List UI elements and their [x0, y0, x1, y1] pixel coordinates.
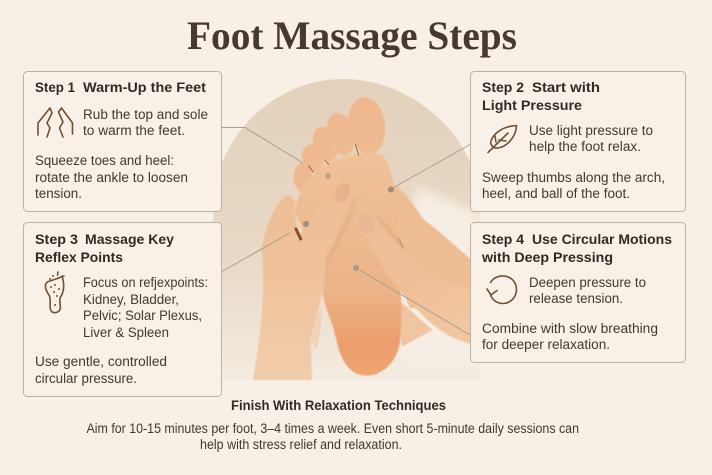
- heading: step 4: Step 4: [482, 231, 524, 247]
- text: step 1 detail: rotate the ankle to loosen: [35, 170, 188, 185]
- right thumb nail: [354, 210, 378, 237]
- text: step 4 intro: Deepen pressure to: [529, 275, 646, 290]
- text: step 2 intro: help the foot relax.: [529, 139, 641, 154]
- text: step 1 intro: to warm the feet.: [83, 123, 185, 138]
- panel: step 1: [24, 72, 222, 212]
- heading: step 1: Step 1: [35, 79, 75, 95]
- leader line: step 3: [222, 221, 309, 272]
- icon: warming hands: [38, 108, 72, 137]
- heading: step 3: [35, 231, 174, 265]
- left thumb nail: [333, 181, 353, 204]
- text: step 1 intro: Rub the top and sole: [83, 107, 208, 122]
- sole of foot: [295, 152, 401, 376]
- arch backdrop: [213, 79, 480, 380]
- finger piece behind heel: [311, 310, 322, 350]
- text: step 4 detail: [482, 321, 658, 352]
- heading: step 2: Step 2: [482, 79, 524, 95]
- footer text: Aim for 10-15 minutes per foot, 3–4 times a week. Even short 5-minute daily sessions can: [86, 421, 579, 436]
- heading: step 4: Use Circular Motions: [532, 231, 672, 247]
- text: step 4 intro: [529, 275, 646, 306]
- panel: step 3: [24, 222, 222, 396]
- text: step 4 detail: Combine with slow breathing: [482, 321, 658, 336]
- text: step 2 intro: Use light pressure to: [529, 123, 653, 138]
- panel: step 2: [470, 72, 686, 212]
- footer text: help with stress relief and relaxation.: [200, 437, 402, 452]
- right thumb and hand: [357, 212, 473, 344]
- text: step 3 detail: circular pressure.: [35, 371, 137, 386]
- shadow beside right thumb: [377, 217, 403, 248]
- toe creases: [309, 144, 359, 172]
- title: Foot Massage Steps: [187, 13, 517, 58]
- forearm piece behind heel: [397, 298, 433, 347]
- text: step 3 detail: Use gentle, controlled: [35, 354, 167, 369]
- heading: step 2: Light Pressure: [482, 97, 582, 113]
- heading: step 3: Reflex Points: [35, 249, 123, 265]
- leader line: step 1: [221, 128, 331, 179]
- text: step 3 intro: [83, 275, 208, 340]
- leader line: step 2: [388, 144, 470, 192]
- heading: step 3: Massage Key: [85, 231, 174, 247]
- footer text: [86, 421, 579, 452]
- heading: step 4: with Deep Pressing: [481, 249, 613, 265]
- icon: feather: [488, 126, 516, 152]
- heading: step 3: Step 3: [35, 231, 78, 247]
- text: step 1 detail: Squeeze toes and heel:: [35, 153, 174, 168]
- text: step 2 detail: Sweep thumbs along the arch,: [482, 170, 665, 185]
- shadow between thumb and palm: [296, 229, 301, 239]
- text: step 1 detail: tension.: [35, 186, 82, 201]
- toes: [293, 95, 389, 193]
- text: step 4 detail: for deeper relaxation.: [482, 337, 610, 352]
- text: step 3 intro: Focus on refjexpoints:: [83, 275, 208, 290]
- text: step 2 detail: heel, and ball of the foot.: [482, 186, 630, 201]
- text: step 3 intro: Kidney, Bladder,: [83, 292, 179, 307]
- hand crease: [399, 238, 403, 248]
- panel: step 4: [470, 222, 686, 362]
- central photo: hands massaging a foot: [210, 79, 487, 385]
- text: step 3 intro: Pelvic; Solar Plexus,: [83, 308, 202, 323]
- text: step 1 detail: [35, 153, 188, 201]
- leader line: step 4: [353, 265, 470, 335]
- heading: step 1: [35, 79, 206, 95]
- heading: step 1: Warm-Up the Feet: [83, 79, 206, 95]
- fabric: [210, 185, 487, 385]
- text: step 3 intro: Liver & Spleen: [83, 325, 169, 340]
- text: step 2 detail: [482, 170, 665, 201]
- icon: foot with reflex points: [45, 272, 64, 313]
- near left hand: [253, 183, 353, 380]
- heading: step 2: Start with: [532, 79, 600, 95]
- heading: step 4: [481, 231, 672, 265]
- icon: circular arrow: [487, 276, 516, 304]
- text: step 4 intro: release tension.: [529, 291, 623, 306]
- far hand behind foot: [390, 185, 473, 308]
- footer heading: Finish With Relaxation Techniques: [231, 397, 446, 413]
- text: step 1 intro: [83, 107, 208, 138]
- text: step 3 detail: [35, 354, 167, 386]
- shadow beside left thumb: [327, 198, 355, 263]
- heading: step 2: [482, 79, 600, 113]
- text: step 2 intro: [529, 123, 653, 154]
